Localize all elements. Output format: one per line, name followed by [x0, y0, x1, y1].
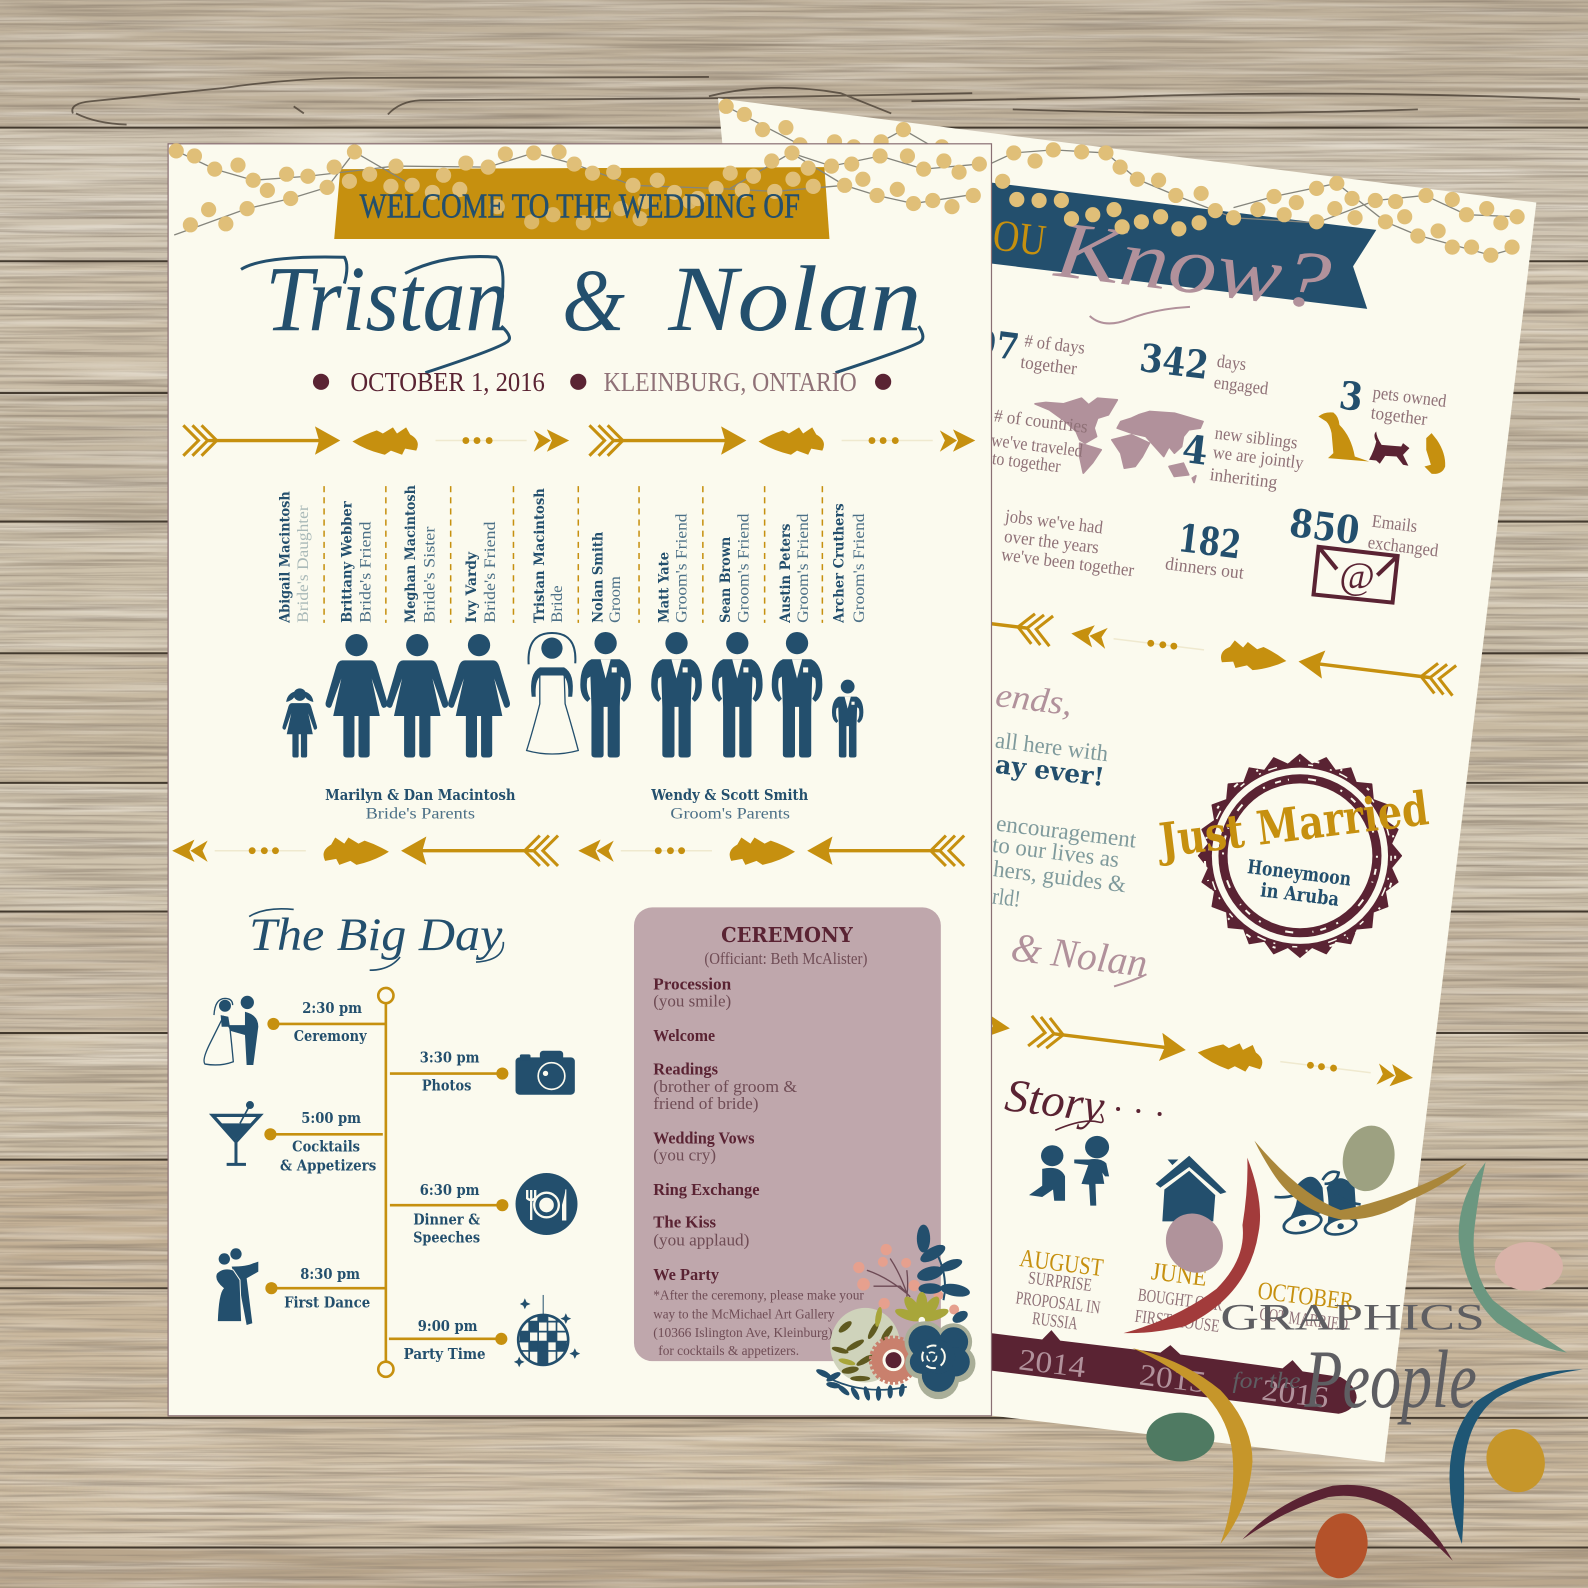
stat: 4 new siblings: 4: [1180, 427, 1210, 475]
icon: martini: [213, 1101, 260, 1164]
wedding party names: Bride's Daughter: [294, 505, 312, 623]
panel: ceremony: (Officiant: Beth McAlister): [704, 949, 867, 968]
title banner: [334, 167, 829, 239]
logo: navy swoosh: [1450, 1369, 1583, 1544]
world map: [1035, 398, 1203, 482]
panel: ceremony: Readings: [653, 1060, 718, 1079]
logo: orange dot: [1311, 1510, 1372, 1581]
ribbon: know banner: [972, 180, 1376, 327]
timeline: Party Time: [404, 1345, 486, 1363]
stat: 97 days together: # of days: [1023, 330, 1086, 358]
parents: Marilyn & Dan Macintosh: [325, 786, 515, 804]
wedding party names: Bride's Sister: [420, 526, 438, 623]
panel: ceremony: [634, 907, 941, 1361]
logo: teal swoosh: [1459, 1162, 1567, 1353]
stamp: just married: Just Married: [1153, 780, 1431, 868]
logo: olive dot: [1337, 1122, 1400, 1195]
stat: 850 emails: 850: [1287, 501, 1362, 554]
stat: 3 pets owned: 3: [1337, 373, 1365, 421]
parents: [325, 786, 808, 822]
timeline: Speeches: [413, 1229, 480, 1247]
wedding party names: Archer Cruthers: [832, 503, 848, 624]
timeline band with years: 2015: [1137, 1358, 1208, 1400]
wedding party names: Groom's Friend: [850, 513, 868, 623]
panel: ceremony: CEREMONY: [721, 923, 853, 947]
arrow divider top: [183, 425, 975, 456]
stat: countries traveled: to together: [991, 448, 1062, 476]
wedding party names: Groom's Friend: [794, 513, 812, 623]
stat: 3 pets owned: [1337, 373, 1448, 429]
message: dear friends: ends,: [994, 676, 1075, 723]
stat: jobs: jobs we've had: [1003, 506, 1104, 538]
timeline: & Appetizers: [280, 1157, 376, 1175]
logo: rose dot: [1157, 1206, 1232, 1280]
panel: ceremony: Procession: [653, 974, 732, 993]
story labels: AUGUST: [1018, 1244, 1105, 1282]
timeline icons: [204, 996, 580, 1367]
wedding party names: Meghan Macintosh: [403, 485, 419, 623]
timeline: [264, 988, 508, 1377]
panel: ceremony: The Kiss: [653, 1212, 716, 1231]
parents: Bride's Parents: [366, 804, 475, 822]
logo: gold dot: [1479, 1423, 1552, 1498]
parents: Groom's Parents: [670, 804, 790, 822]
logo: pink dot: [1495, 1242, 1563, 1291]
heading: story: Story: [1002, 1069, 1107, 1133]
stat: 97 days together: together: [1019, 352, 1078, 379]
logo: red swoosh: [1124, 1158, 1260, 1333]
stat: 342 days engaged: 342: [1137, 336, 1211, 389]
timeline: 6:30 pm: [420, 1181, 480, 1199]
timeline band with years: [952, 1328, 1357, 1415]
stat: 182 dinners out: [1164, 516, 1245, 583]
icons: proposal, house, bells: [1029, 1136, 1361, 1237]
stat: 850 emails: Emails: [1371, 511, 1418, 536]
stat: 342 days engaged: engaged: [1213, 372, 1270, 399]
stat: 182 dinners out: dinners out: [1164, 553, 1245, 583]
date and location: OCTOBER 1, 2016: [350, 367, 545, 397]
stat: jobs: [1000, 506, 1135, 580]
story labels: SURPRISE: [1027, 1267, 1093, 1295]
stat: 3 pets owned: together: [1370, 402, 1428, 429]
panel: ceremony: We Party: [653, 1265, 719, 1284]
panel: ceremony: (you cry): [653, 1146, 716, 1165]
wedding party names: Abigail Macintosh: [278, 491, 294, 624]
banner text: WELCOME TO THE WEDDING OF: [360, 188, 800, 226]
watermark logo: [1124, 1122, 1583, 1581]
timeline: Ceremony: [294, 1027, 368, 1045]
icon: email envelope: @: [1339, 555, 1375, 597]
stat: 4 new siblings: new siblings: [1214, 423, 1299, 453]
stat: 4 new siblings: we are jointly: [1212, 442, 1305, 473]
message: dear friends: encouragement: [995, 811, 1138, 854]
panel: ceremony: Welcome: [653, 1026, 715, 1045]
logo: green dot: [1146, 1413, 1214, 1461]
stat: 97 days together: 97: [971, 321, 1022, 369]
timeline: 2:30 pm: [302, 999, 362, 1017]
logo: maroon swoosh: [1242, 1485, 1453, 1561]
icon: email envelope: [1314, 547, 1398, 603]
story labels: GOT MARRIED: [1258, 1304, 1349, 1334]
stat: 850 emails: exchanged: [1367, 532, 1440, 561]
message: dear friends: all here with: [994, 728, 1110, 767]
stat: jobs: we've been together: [1000, 544, 1135, 580]
stat: countries traveled: we've traveled: [990, 430, 1084, 461]
front sheet: [168, 143, 991, 1416]
stat: jobs: over the years: [1003, 526, 1100, 557]
icon: plate and cutlery: [516, 1173, 578, 1235]
logo: bronze swoosh: [1254, 1141, 1467, 1220]
timeline: 3:30 pm: [420, 1048, 480, 1066]
timeline band with years: 2016: [1260, 1373, 1331, 1415]
panel: ceremony: for cocktails & appetizers.: [658, 1343, 799, 1358]
logo: wordmark: for the: [1232, 1369, 1301, 1394]
names title: Nolan: [667, 248, 922, 351]
arrow row upper on back: [666, 569, 1456, 696]
timeline: 8:30 pm: [300, 1265, 360, 1283]
wedding party names: Tristan Macintosh: [532, 488, 548, 623]
wedding party names: Matt Yate: [656, 552, 672, 623]
stat: 850 emails: [1287, 501, 1440, 561]
panel: ceremony: friend of bride): [653, 1094, 759, 1113]
panel: ceremony: (brother of groom &: [653, 1077, 798, 1096]
stat: 97 days together: [971, 321, 1086, 379]
story labels: PROPOSAL IN: [1015, 1287, 1101, 1318]
story labels: JUNE: [1150, 1257, 1208, 1292]
logo: wordmark: [1220, 1297, 1485, 1425]
stat: countries traveled: # of countries: [993, 405, 1089, 437]
wedding party names: Groom: [606, 576, 624, 623]
timeline band with years: 2014: [1017, 1342, 1087, 1384]
wedding party names: Groom's Friend: [734, 513, 752, 623]
timeline: First Dance: [284, 1293, 370, 1311]
wedding party names: [278, 485, 868, 624]
stat: 4 new siblings: inheriting: [1209, 464, 1279, 492]
stat: 4 new siblings: [1180, 423, 1305, 492]
stamp: just married: in Aruba: [1259, 878, 1341, 911]
panel: ceremony: (10366 Islington Ave, Kleinburg): [653, 1325, 832, 1340]
wedding party names: Groom's Friend: [673, 513, 691, 623]
story labels: RUSSIA: [1031, 1308, 1079, 1334]
message: dear friends: ay ever!: [994, 749, 1106, 792]
stat: 342 days engaged: [1137, 336, 1270, 399]
wedding party names: Bride's Friend: [481, 522, 499, 623]
heading: the big day: The Big Day: [249, 909, 503, 961]
front bunting lights: [169, 143, 987, 235]
back bunting lights: [719, 99, 1525, 263]
logo: wordmark: People: [1304, 1335, 1477, 1425]
date and location: [313, 367, 891, 397]
names title: Tristan: [265, 248, 508, 351]
timeline: Dinner &: [413, 1210, 480, 1228]
names title: [241, 248, 923, 373]
panel: ceremony: Ring Exchange: [653, 1180, 760, 1199]
icon: floral bouquet: [815, 1225, 975, 1401]
stamp: just married: Honeymoon: [1246, 855, 1352, 891]
wedding party figures: [282, 632, 863, 758]
panel: ceremony: way to the McMichael Art Gallery: [653, 1307, 835, 1322]
parents: Wendy & Scott Smith: [650, 786, 808, 804]
icon: camera: [516, 1051, 575, 1095]
icon: dog and cats: [1318, 412, 1445, 474]
names title: &: [562, 252, 625, 350]
story labels: FIRST HOUSE: [1134, 1306, 1221, 1336]
timeline: Photos: [422, 1077, 471, 1095]
icon: first dance: [216, 1248, 258, 1325]
message: dear friends: rld!: [991, 884, 1022, 913]
ribbon: know banner: Know?: [1050, 204, 1335, 327]
panel: ceremony: *After the ceremony, please make your: [653, 1287, 865, 1302]
ribbon: know banner: OU: [990, 209, 1049, 265]
wedding party names: Brittany Webber: [339, 501, 355, 623]
wedding party names: Sean Brown: [718, 537, 734, 623]
stat: 3 pets owned: pets owned: [1372, 382, 1448, 411]
stamp: just married: [1153, 755, 1431, 957]
stat: 342 days engaged: days: [1216, 351, 1247, 374]
wedding party names: Austin Peters: [778, 524, 794, 624]
heading: story: [1002, 1069, 1162, 1133]
message: dear friends: [991, 676, 1150, 986]
story labels: BOUGHT OUR: [1137, 1284, 1224, 1315]
timeline: 9:00 pm: [418, 1317, 478, 1335]
timeline: Cocktails: [292, 1138, 360, 1156]
arrow row lower on back: [625, 966, 1415, 1093]
panel: ceremony: Wedding Vows: [653, 1128, 755, 1147]
logo: wordmark: GRAPHICS: [1220, 1297, 1485, 1338]
message: dear friends: to our lives as: [991, 832, 1121, 873]
panel: ceremony: (you smile): [653, 992, 731, 1011]
stat: countries traveled: [990, 405, 1089, 476]
story labels: OCTOBER: [1256, 1277, 1355, 1316]
wedding party names: Nolan Smith: [591, 532, 607, 623]
stat: 182 dinners out: 182: [1176, 516, 1243, 569]
panel: ceremony: (you applaud): [653, 1231, 749, 1250]
message: dear friends: & Nolan: [1009, 924, 1150, 986]
icon: disco ball: [514, 1295, 580, 1367]
timeline: 5:00 pm: [301, 1109, 361, 1127]
date and location: KLEINBURG, ONTARIO: [604, 367, 857, 397]
arrow divider middle: [172, 836, 964, 866]
wedding party names: Bride: [548, 585, 566, 623]
story labels: [1015, 1244, 1355, 1336]
message: dear friends: hers, guides &: [992, 856, 1128, 898]
wedding party names: Bride's Friend: [357, 522, 375, 623]
icon: bride and groom: [204, 996, 258, 1065]
logo: gold swoosh: [1132, 1348, 1252, 1544]
back sheet: did you know: [625, 98, 1536, 1462]
wedding party names: Ivy Vardy: [464, 551, 480, 623]
